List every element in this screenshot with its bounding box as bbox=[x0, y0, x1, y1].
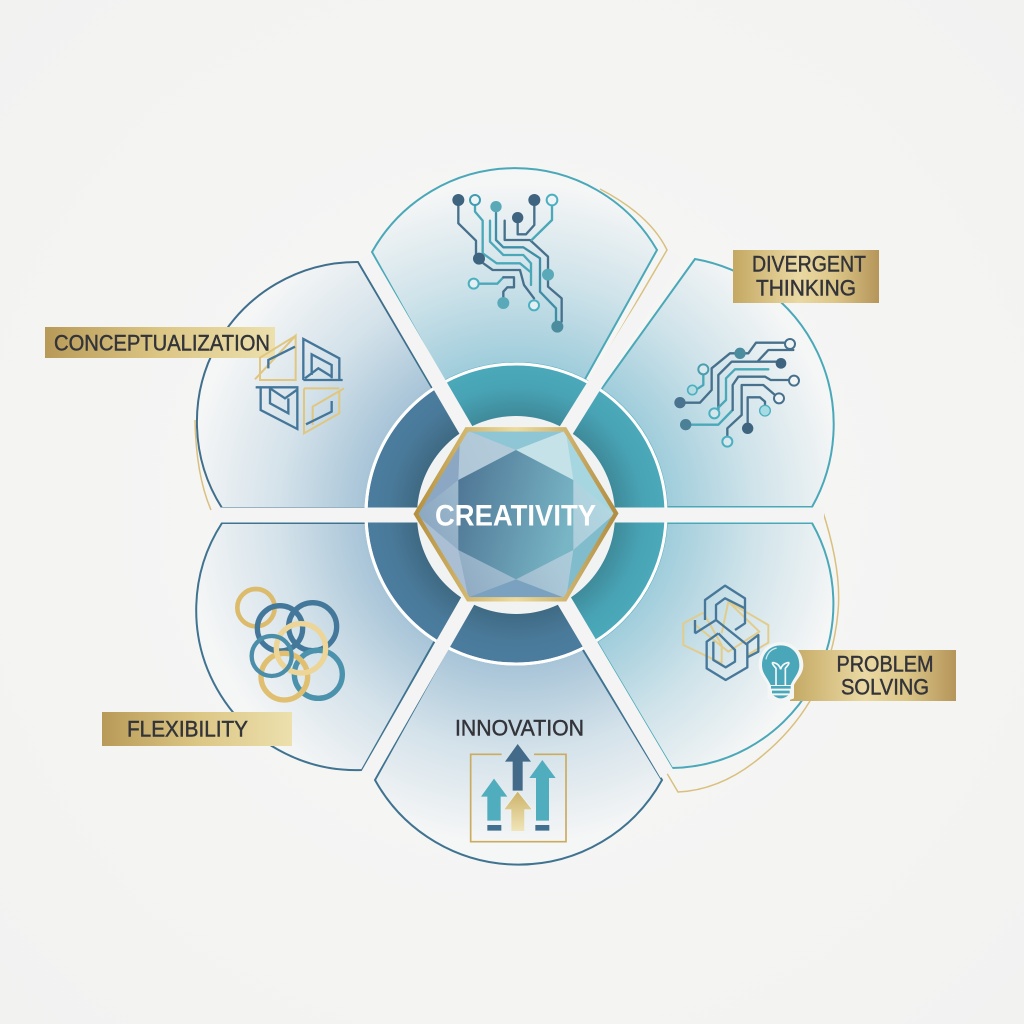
label: flexibility: FLEXIBILITY bbox=[127, 716, 248, 742]
left arrow bbox=[481, 779, 507, 821]
petal: innovation bbox=[375, 612, 662, 865]
label: problem solving: SOLVING bbox=[841, 674, 929, 700]
gold arrow bbox=[504, 792, 532, 831]
gem facets bbox=[417, 432, 516, 513]
icon: concept blocks bbox=[255, 336, 344, 433]
label: innovation: INNOVATION bbox=[455, 716, 584, 740]
spokes bbox=[212, 254, 824, 775]
icon: hexagon knot bbox=[683, 586, 768, 680]
creativity wheel diagram bbox=[195, 168, 839, 865]
ring: dark half bbox=[366, 364, 666, 664]
ring: teal half bbox=[439, 362, 668, 645]
arrow bases bbox=[487, 825, 549, 831]
center gem bbox=[416, 429, 616, 599]
label: conceptualization: CONCEPTUALIZATION bbox=[54, 330, 270, 356]
petal: flexibility bbox=[196, 523, 455, 770]
icon: circuit right bbox=[674, 339, 799, 447]
gem gold frame bbox=[416, 429, 616, 599]
gem base bbox=[416, 429, 616, 599]
icon: innovation arrows bbox=[471, 744, 566, 842]
label: problem solving bbox=[790, 650, 956, 701]
label: problem solving: PROBLEM bbox=[836, 652, 934, 676]
label: flexibility bbox=[102, 712, 292, 746]
petal: top circuit bbox=[372, 168, 657, 424]
label: divergent thinking: THINKING bbox=[756, 276, 856, 300]
petal: conceptualization bbox=[197, 262, 445, 508]
inner white circle bbox=[417, 416, 615, 614]
label: divergent thinking bbox=[733, 250, 879, 303]
dark arrow bbox=[505, 744, 531, 791]
label: divergent thinking: DIVERGENT bbox=[752, 252, 866, 276]
gold accent arcs bbox=[195, 189, 839, 792]
title: creativity: CREATIVITY bbox=[435, 500, 596, 532]
right arrow bbox=[529, 760, 556, 821]
icon: lightbulb bbox=[759, 642, 803, 701]
petal: divergent thinking bbox=[572, 259, 834, 507]
icon frame bbox=[471, 754, 566, 842]
petal: problem solving bbox=[575, 523, 833, 768]
icon: circuit top bbox=[452, 194, 563, 333]
icon: interlocking rings bbox=[237, 589, 342, 700]
